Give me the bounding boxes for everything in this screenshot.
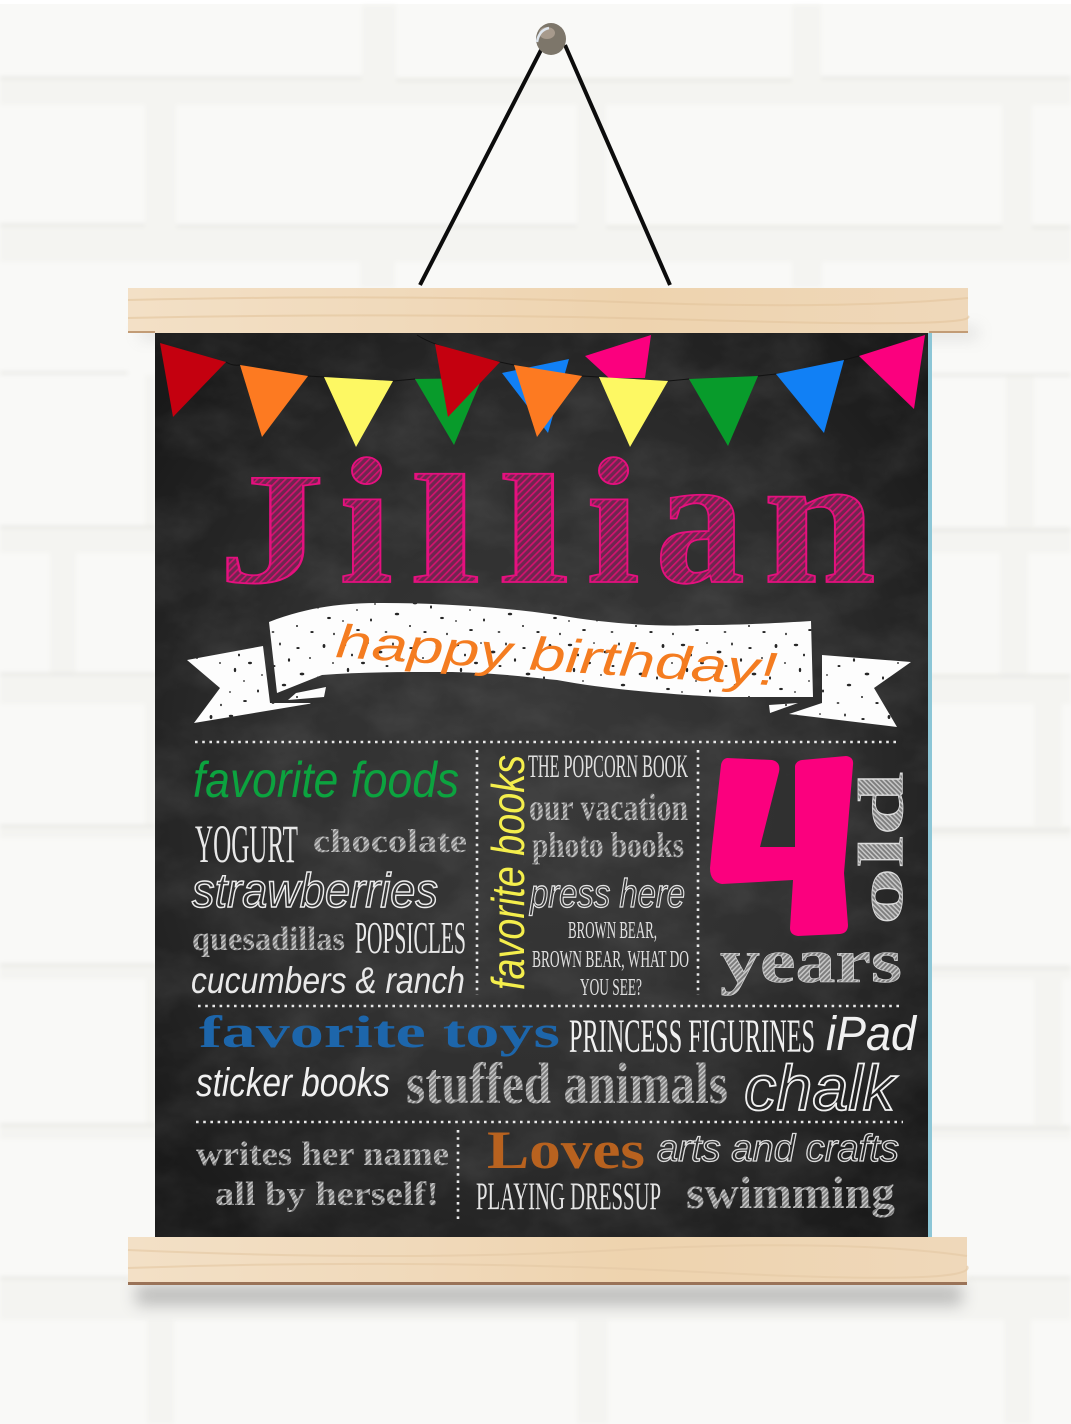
- panel: favorite foods: strawberries: [192, 865, 438, 918]
- chalkboard panel: [155, 333, 932, 1238]
- front row flags: [160, 335, 925, 447]
- nail: [536, 23, 566, 55]
- ribbon right tail: [769, 655, 911, 727]
- label: old: old: [845, 772, 916, 925]
- heading: favorite foods: favorite foods: [193, 752, 459, 808]
- title: Jillian: n: [763, 417, 876, 623]
- title: Jillian: l: [410, 443, 481, 616]
- panel: writes her name: [196, 1136, 449, 1213]
- title: Jillian: J: [218, 441, 325, 617]
- bottom wooden rail: [128, 1237, 968, 1285]
- infographic poster scene: THE POPCORN BOOK: [528, 749, 688, 785]
- panel: favorite books: [482, 749, 689, 1001]
- panel: writes her name: all by herself!: [215, 1176, 439, 1213]
- title: Jillian: [218, 417, 876, 623]
- infographic poster scene: POPSICLES: [355, 913, 466, 963]
- title: Jillian: a: [655, 417, 745, 623]
- title: Jillian: l: [498, 443, 570, 616]
- panel: favorite books: BROWN BEAR, WHAT DO: [532, 947, 689, 973]
- panel: favorite foods: [191, 752, 467, 1001]
- panel: favorite toys: sticker books: [196, 1061, 390, 1105]
- panel: favorite books: press here: [529, 872, 685, 916]
- ribbon main: [269, 603, 813, 697]
- ribbon text: happy birthday!: [334, 614, 779, 696]
- top rail shadow: [140, 328, 978, 338]
- panel: favorite toys: stuffed animals: [406, 1051, 728, 1116]
- hanging cord: [420, 45, 670, 285]
- panel: favorite toys: iPad: [826, 1008, 917, 1061]
- title: Jillian: i: [339, 422, 393, 621]
- panel: loves: swimming: [686, 1167, 895, 1218]
- panel: favorite books: YOU SEE?: [580, 975, 642, 1001]
- panel: loves: arts and crafts: [657, 1128, 899, 1170]
- ribbon left tail: [187, 646, 326, 723]
- number 4: [710, 756, 853, 936]
- dotted dividers: [195, 742, 903, 1222]
- heading: favorite toys: favorite toys: [199, 1006, 560, 1057]
- label: years: years: [720, 928, 902, 996]
- panel: writes her name: writes her name: [196, 1136, 449, 1173]
- panel: favorite books: BROWN BEAR,: [568, 918, 657, 944]
- panel: favorite foods: YOGURT: [195, 814, 298, 874]
- panel: favorite foods: quesadillas: [192, 921, 345, 958]
- panel: favorite toys: PRINCESS FIGURINES: [569, 1010, 815, 1063]
- panel: favorite books: our vacation: [529, 787, 688, 829]
- top wooden rail: [128, 288, 968, 333]
- bunting flags: [160, 335, 925, 447]
- back row flags: [415, 335, 651, 445]
- panel: favorite toys: chalk: [744, 1052, 898, 1124]
- bunting strings: [226, 335, 859, 381]
- panel: favorite foods: chocolate: [313, 824, 467, 860]
- heading: favorite books: favorite books: [482, 755, 534, 990]
- title: Jillian: i: [586, 422, 640, 621]
- panel: loves: PLAYING DRESSUP: [476, 1175, 661, 1218]
- panel: favorite toys: [196, 1006, 917, 1124]
- panel: age: [710, 756, 916, 996]
- panel: favorite books: photo books: [532, 825, 684, 865]
- panel: loves: [476, 1120, 899, 1218]
- bottom rail shadow: [136, 1285, 962, 1305]
- ribbon banner: [187, 603, 911, 727]
- panel: favorite foods: cucumbers & ranch: [191, 960, 465, 1001]
- heading: loves: Loves: [487, 1120, 645, 1180]
